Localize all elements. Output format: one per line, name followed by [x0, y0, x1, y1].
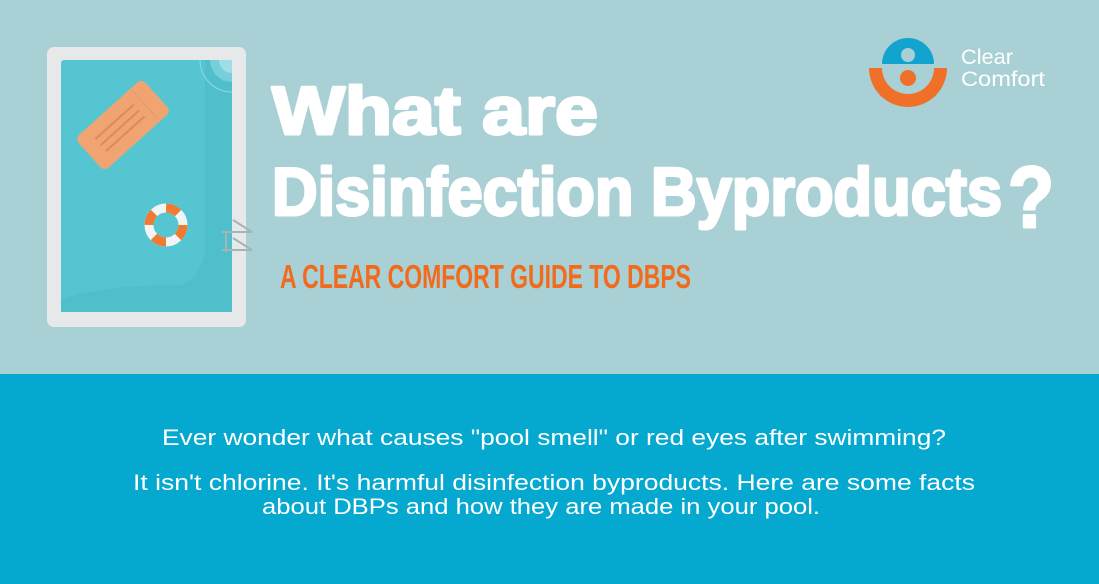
text: intro: Ever wonder what causes "pool smell" or red eyes after swimming? — [162, 425, 946, 450]
title: Disinfection Byproducts — [272, 154, 1002, 230]
logo: Comfort — [961, 68, 1045, 91]
title: ? — [1008, 150, 1054, 246]
title — [272, 73, 1054, 246]
icon: life ring — [149, 208, 183, 242]
subtitle: A CLEAR COMFORT GUIDE TO DBPS — [280, 258, 691, 295]
panel: pool illustration — [47, 47, 252, 327]
logo: Clear — [961, 46, 1013, 69]
text: intro: about DBPs and how they are made in your pool. — [262, 494, 820, 519]
text: intro — [133, 425, 975, 519]
title: What are — [272, 73, 598, 149]
logo — [869, 38, 1045, 107]
icon: ladder — [222, 220, 252, 252]
panel: intro band — [0, 374, 1099, 584]
text: intro: It isn't chlorine. It's harmful disinfection byproducts. Here are some facts — [133, 470, 975, 495]
icon: float mattress — [75, 79, 171, 171]
